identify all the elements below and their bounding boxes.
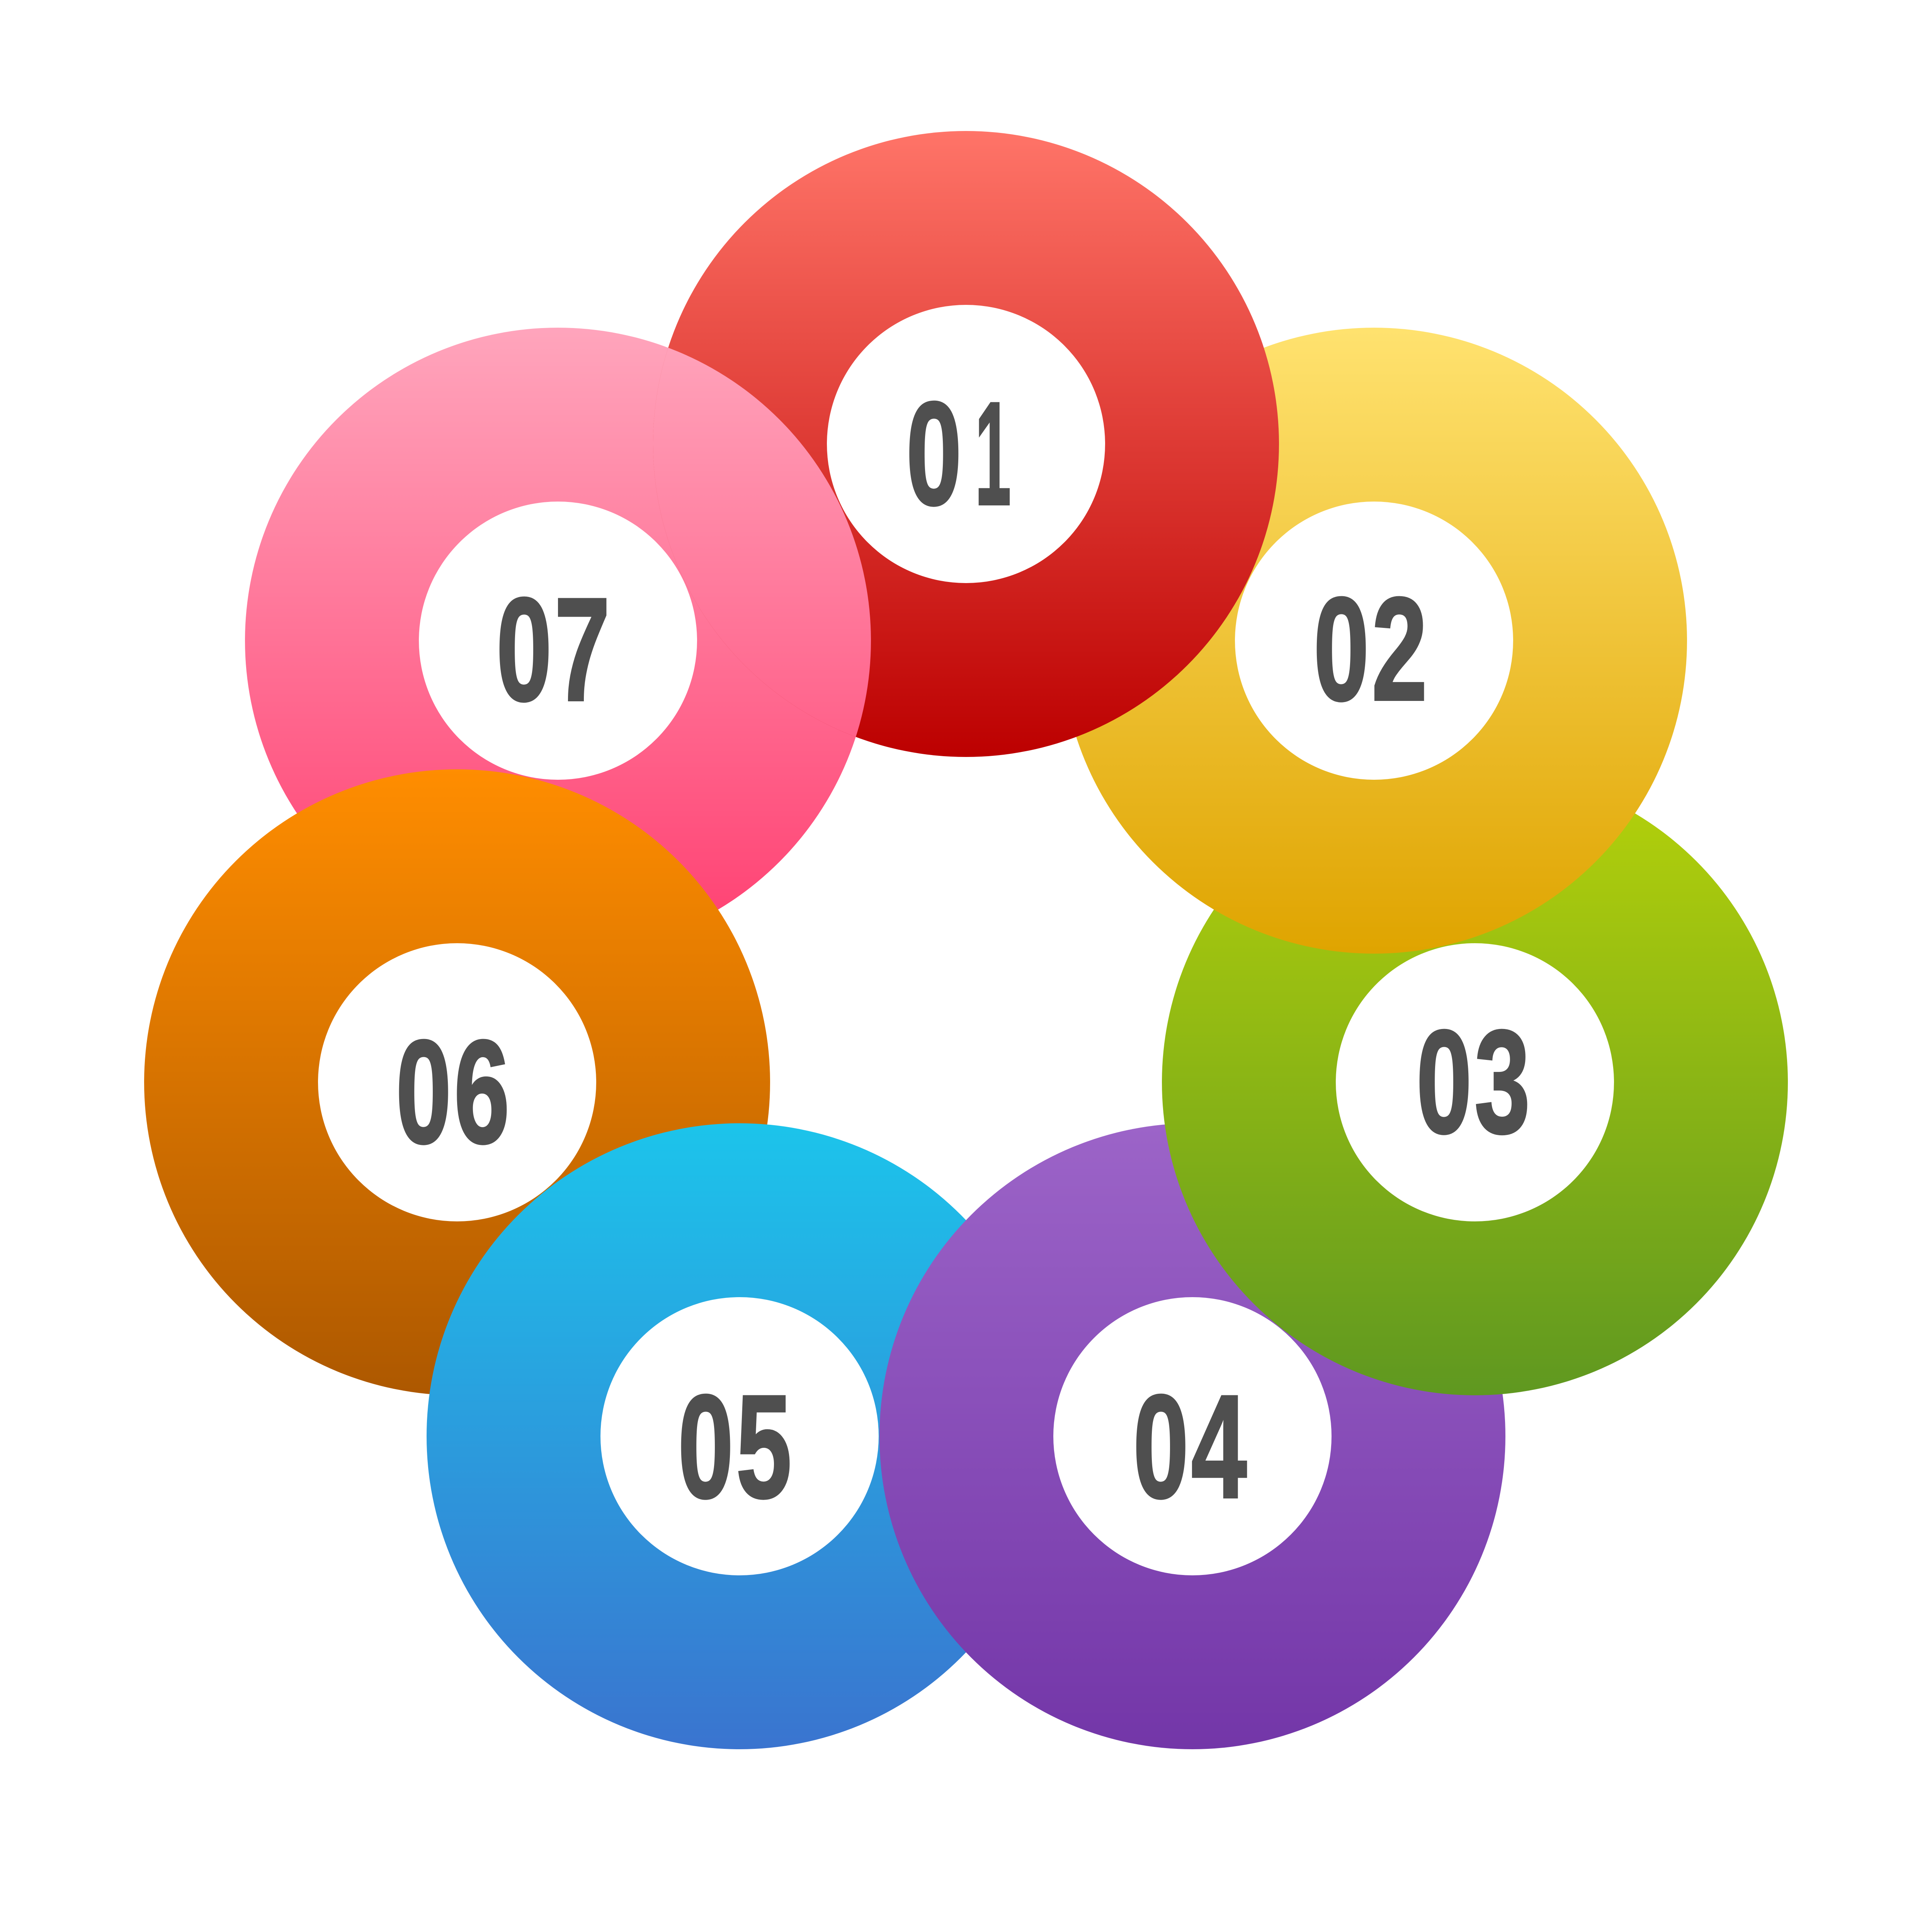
- panel: step 02 yellow circle: [1061, 328, 1687, 954]
- number 03: 03: [1416, 1000, 1533, 1164]
- number 06: 06: [396, 1010, 512, 1174]
- panel: step 01 red circle: [653, 131, 1279, 757]
- panel: step 07 pink circle: [245, 328, 871, 954]
- number 01: 1: [975, 372, 1011, 536]
- number 01: 0: [906, 371, 962, 536]
- number 02: 02: [1313, 567, 1430, 731]
- panel: step 04 purple circle: [879, 1123, 1505, 1749]
- number 04: 04: [1133, 1364, 1250, 1529]
- panel: step 06 orange circle: [144, 769, 770, 1395]
- number 05: 05: [678, 1364, 794, 1529]
- number 07: 07: [496, 567, 613, 731]
- pink circle overlap on top of red circle: [653, 348, 871, 737]
- panel: step 03 green circle: [1162, 769, 1788, 1395]
- panel: step 05 blue circle: [427, 1123, 1053, 1749]
- number 01: [906, 371, 1011, 536]
